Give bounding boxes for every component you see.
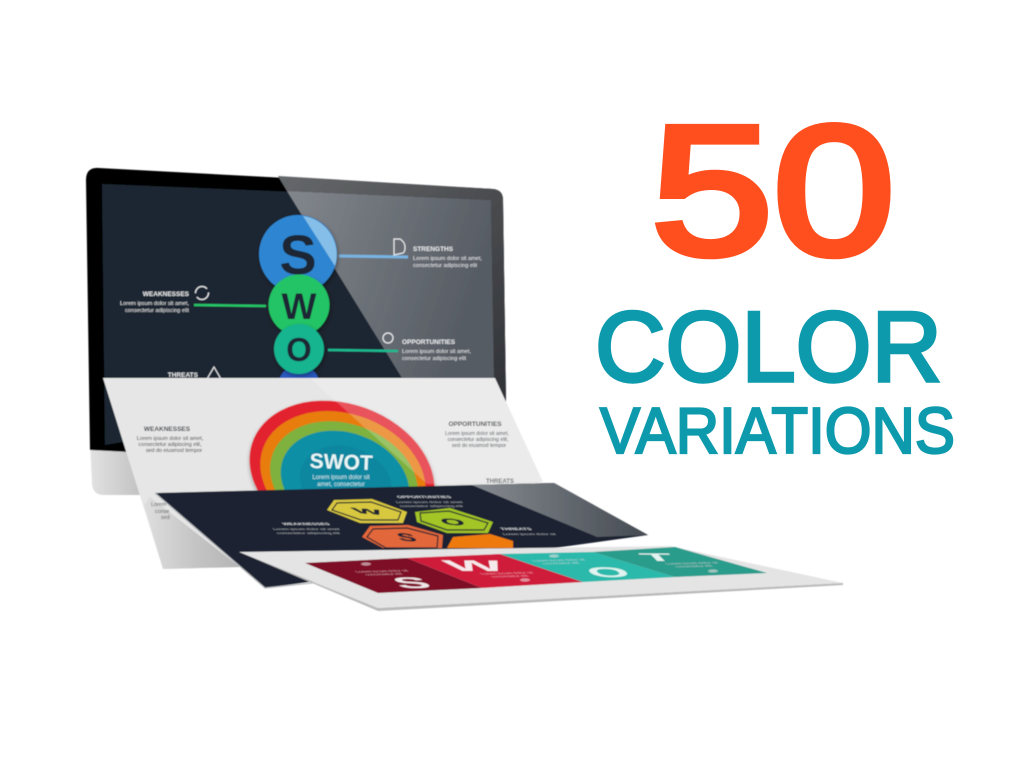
slide 1 shaded lower fold <box>144 497 240 569</box>
text: weaknesses: consectetur adipiscing elit <box>275 532 342 535</box>
line: strengths <box>339 256 408 257</box>
text: threats: Lorem ipsum dolor sit <box>502 533 558 536</box>
band S <box>305 558 482 593</box>
text: opportunities: OPPORTUNITIES <box>448 421 502 428</box>
circle S: S <box>279 223 317 286</box>
icon: threats <box>207 367 221 379</box>
circle W <box>268 274 330 336</box>
letter S: S <box>386 574 437 592</box>
band captions <box>354 558 721 578</box>
text: opportunities: Lorem ipsum dolor sit amet <box>395 501 464 504</box>
hexagon O: O <box>437 516 468 528</box>
band captions: consectetur elit <box>489 575 531 578</box>
big number: 50: 50 <box>651 87 895 293</box>
text: weaknesses: Lorem ipsum dolor sit amet, <box>137 436 204 442</box>
text: opportunities: OPPORTUNITIES <box>396 496 453 499</box>
circle W: W <box>282 286 317 327</box>
band T <box>593 547 767 577</box>
slide 1 glare <box>310 378 543 484</box>
monitor screen <box>102 176 506 445</box>
monitor silver chin <box>90 440 180 495</box>
line: opportunities <box>328 350 398 351</box>
icon: strengths <box>394 239 405 255</box>
text: opportunities: consectetur adipiscing elit <box>398 505 465 508</box>
hexagon S <box>362 525 443 548</box>
hexagon T <box>447 534 513 548</box>
hexagon O <box>415 508 493 533</box>
hexagon S: S <box>394 530 420 544</box>
circle O: O <box>286 331 312 368</box>
text: strengths: STRENGTHS <box>413 246 454 253</box>
text: threats <box>500 528 558 536</box>
icon: opportunities <box>383 333 393 343</box>
slide 2: hexagon SWOT <box>155 483 648 588</box>
band captions: consectetur elit <box>673 565 715 568</box>
band captions: consectetur elit <box>363 573 405 576</box>
band W <box>407 554 583 588</box>
small band icons <box>361 554 718 582</box>
band O <box>500 552 675 582</box>
monitor black bezel <box>86 168 506 452</box>
heading: SWOT: SWOT <box>309 450 373 475</box>
letter O: O <box>580 564 636 580</box>
slide 1 paper <box>103 378 543 569</box>
text: weaknesses <box>272 523 342 535</box>
slide 1: rainbow SWOT <box>103 376 543 572</box>
text: weaknesses <box>137 426 204 454</box>
band captions: Lorem ipsum dolor sit <box>664 561 721 566</box>
slide content: SWOT circles <box>120 214 482 378</box>
text: lower left lorem: conse <box>155 509 169 515</box>
circle T <box>279 370 319 378</box>
circle O <box>274 324 324 374</box>
text: opportunities: consectetur adipiscing elit <box>402 356 466 362</box>
text: weaknesses: sed do eiusmod tempor <box>146 448 202 454</box>
slide 3: colored SWOT bands <box>239 546 843 611</box>
text: opportunities: sed do eiusmod tempor <box>452 443 506 449</box>
text: opportunities <box>395 496 465 508</box>
text: weaknesses: WEAKNESSES <box>143 291 190 298</box>
slide 2 glare <box>472 483 648 537</box>
text: strengths: Lorem ipsum dolor sit amet, <box>413 256 482 262</box>
band captions: Lorem ipsum dolor sit <box>531 558 588 563</box>
text: strengths <box>413 246 482 269</box>
circle S <box>259 215 337 293</box>
text: opportunities: consectetur adipiscing elit, <box>448 437 508 443</box>
text: threats: THREATS <box>500 528 534 531</box>
caption: SWOT: amet, consectetur <box>317 482 365 488</box>
band captions: consectetur elit <box>540 562 582 565</box>
line: weaknesses <box>194 305 266 306</box>
text: lower left lorem <box>151 502 170 521</box>
text: opportunities: Lorem ipsum dolor sit amet, <box>445 431 509 437</box>
hexagon W <box>327 499 407 523</box>
caption: SWOT: Lorem ipsum dolor sit <box>312 475 370 481</box>
screen glare <box>287 191 494 378</box>
text: opportunities: Lorem ipsum dolor sit amet, <box>402 349 471 355</box>
text: opportunities: OPPORTUNITIES <box>402 339 456 346</box>
rainbow rings <box>247 400 437 492</box>
slide 2 bottom edge <box>155 493 330 588</box>
letter T: T <box>635 551 680 564</box>
heading: VARIATIONS: VARIATIONS <box>600 394 955 467</box>
text: opportunities <box>402 339 471 362</box>
text: lower left lorem: sed <box>161 515 170 521</box>
caption: SWOT <box>312 475 370 488</box>
band captions: Lorem ipsum dolor sit <box>354 569 411 574</box>
icon: weaknesses <box>196 286 208 300</box>
text: lower left lorem: Lorem <box>151 502 167 508</box>
text: weaknesses: consectetur adipiscing elit, <box>138 442 202 448</box>
text: weaknesses: Lorem ipsum dolor sit amet, <box>120 301 189 307</box>
text: weaknesses: consectetur adipiscing elit <box>125 308 189 314</box>
heading: COLOR: COLOR <box>595 291 942 402</box>
slide 3 paper <box>239 546 843 608</box>
text: threats: THREATS <box>168 372 199 379</box>
letter W: W <box>437 557 512 575</box>
text: weaknesses: WEAKNESSES <box>281 523 332 526</box>
text: weaknesses: Lorem ipsum dolor sit amet <box>272 528 341 531</box>
text: strengths: consectetur adipiscing elit <box>413 263 477 269</box>
text: weaknesses <box>120 291 190 314</box>
screen reflection on bezel <box>278 176 506 402</box>
monitor mockup with SWOT slide stack <box>86 168 843 611</box>
dark slide background <box>102 184 494 445</box>
text: opportunities <box>445 421 509 449</box>
slide 2 dark paper <box>155 483 648 588</box>
slide 3 edge <box>239 552 843 611</box>
band captions: Lorem ipsum dolor sit <box>479 571 536 576</box>
text: threats on slide 1: THREATS <box>486 479 514 485</box>
text: weaknesses: WEAKNESSES <box>144 426 191 433</box>
hexagon W: W <box>348 506 387 517</box>
